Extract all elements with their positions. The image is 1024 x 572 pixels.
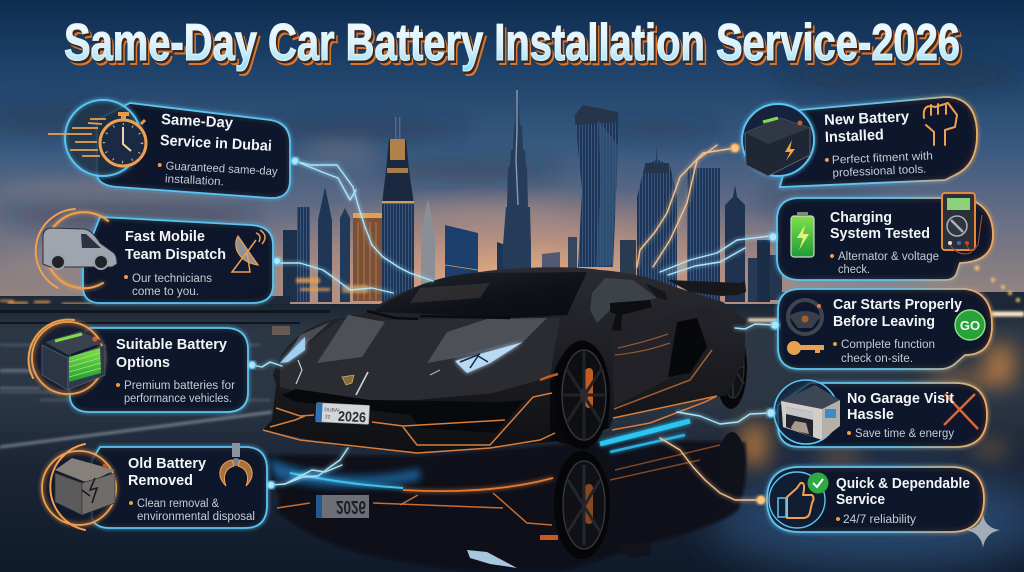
text: environmental disposal (137, 511, 255, 523)
reflected mirror (617, 543, 651, 558)
hood highlights (317, 315, 547, 363)
nose panel (280, 318, 560, 402)
side window (590, 278, 657, 323)
left blue lightning (252, 161, 433, 485)
rear wheel (715, 325, 747, 409)
reflected plate: 2026 (336, 497, 366, 517)
icon: new battery (745, 118, 810, 176)
heading: installation. (165, 173, 224, 188)
reflected headlight (467, 550, 517, 568)
connector node (771, 321, 779, 329)
text: Complete function (841, 339, 935, 351)
connector node (757, 496, 765, 504)
icon: satellite dish (232, 230, 265, 272)
text: Premium batteries for (124, 380, 235, 392)
text (116, 336, 240, 405)
reflected front wheel (554, 451, 610, 559)
connector node (767, 409, 775, 417)
text: Our technicians (132, 273, 212, 285)
front wheel (550, 341, 610, 449)
right blue lightning (660, 236, 775, 424)
text: Removed (128, 472, 193, 489)
heading (157, 111, 281, 191)
text: Hassle (847, 406, 894, 423)
headlights (280, 337, 523, 373)
badge (342, 375, 354, 385)
licence plate: DUBAI (324, 407, 340, 414)
text: Service (836, 491, 885, 508)
background: Dubai skyline (0, 82, 1024, 308)
icon: battery charge (791, 212, 814, 257)
panel: quick and dependable service (757, 467, 984, 532)
reflected plate (316, 495, 369, 518)
text (128, 455, 262, 523)
panel: suitable battery options (29, 320, 255, 412)
text: Options (116, 354, 170, 371)
icon: fist (924, 103, 957, 145)
text: Before Leaving (833, 313, 935, 330)
text: New Battery (824, 108, 910, 129)
text: Old Battery (128, 455, 207, 472)
icon: red cross (944, 394, 978, 429)
text: No Garage Visit (847, 390, 954, 407)
icon: steering wheel (788, 300, 822, 334)
text (830, 209, 940, 276)
icon: GO badge: GO (960, 318, 980, 333)
windshield (373, 272, 587, 318)
connector node (268, 482, 274, 488)
connector node (248, 362, 256, 368)
panel: old battery removed (42, 443, 274, 530)
text: System Tested (830, 225, 930, 242)
panel: fast mobile team dispatch (36, 209, 280, 303)
heading: Same-Day (161, 111, 234, 132)
icon: old battery (55, 458, 115, 515)
text: Charging (830, 209, 892, 226)
panel: same-day service in Dubai (48, 100, 298, 198)
icon: van (43, 228, 117, 269)
connector node (292, 158, 298, 164)
text: Car Starts Properly (833, 296, 963, 313)
reflected trim (277, 445, 720, 525)
car reflection on the road (265, 432, 746, 570)
side body panel (612, 305, 720, 407)
electric connectors (252, 145, 775, 500)
sparkle watermark (966, 514, 1000, 548)
icon: battery (42, 331, 105, 390)
text: come to you. (132, 286, 199, 298)
panel: car starts properly (771, 289, 992, 369)
front vents (282, 389, 525, 433)
text (836, 475, 970, 526)
licence plate (316, 403, 370, 425)
background: sky (0, 0, 1024, 385)
icon: multimeter (942, 193, 982, 254)
text: Clean removal & (137, 498, 219, 510)
text: check on-site. (841, 353, 913, 365)
panel: no garage visit hassle (767, 380, 987, 447)
heading: Service in Dubai (160, 132, 272, 155)
text: Perfect fitment with (832, 150, 933, 167)
icon: stopwatch (48, 112, 146, 166)
Burj tower (503, 82, 531, 302)
text (847, 390, 965, 440)
text: Team Dispatch (125, 246, 226, 263)
text: check. (838, 264, 870, 276)
car (263, 267, 747, 453)
licence plate: 2026 (338, 408, 367, 425)
text (823, 107, 952, 180)
icon: thumbs up (778, 472, 828, 518)
text: Quick & Dependable (836, 475, 970, 492)
car body (263, 267, 745, 453)
icon: mechanical claw (220, 443, 252, 486)
text (124, 228, 265, 298)
connector node (769, 233, 777, 241)
text: Fast Mobile (125, 228, 205, 245)
text: performance vehicles. (124, 393, 232, 405)
icon: garage (781, 385, 840, 440)
text: Suitable Battery (116, 336, 228, 353)
panel: new battery installed (731, 97, 977, 187)
text: Installed (825, 126, 884, 146)
connector node (731, 144, 739, 152)
mirror (610, 300, 652, 331)
icon: GO badge (955, 310, 985, 340)
licence plate: 22 (325, 414, 331, 420)
blue light streaks under car (290, 421, 690, 491)
text: Save time & energy (855, 428, 954, 440)
text: professional tools. (832, 164, 927, 180)
text: Alternator & voltage (838, 251, 939, 263)
panel: charging system tested (769, 193, 993, 280)
text: 24/7 reliability (843, 514, 916, 526)
connector node (274, 258, 280, 264)
heading: Guaranteed same-day (165, 160, 278, 178)
reflected rear wheel (719, 432, 745, 492)
rear wing (668, 280, 746, 296)
text (833, 296, 963, 365)
icon: key (787, 341, 824, 355)
background: wet road (0, 304, 1024, 572)
orange lightning (637, 145, 760, 500)
orange trim lines (263, 350, 717, 453)
